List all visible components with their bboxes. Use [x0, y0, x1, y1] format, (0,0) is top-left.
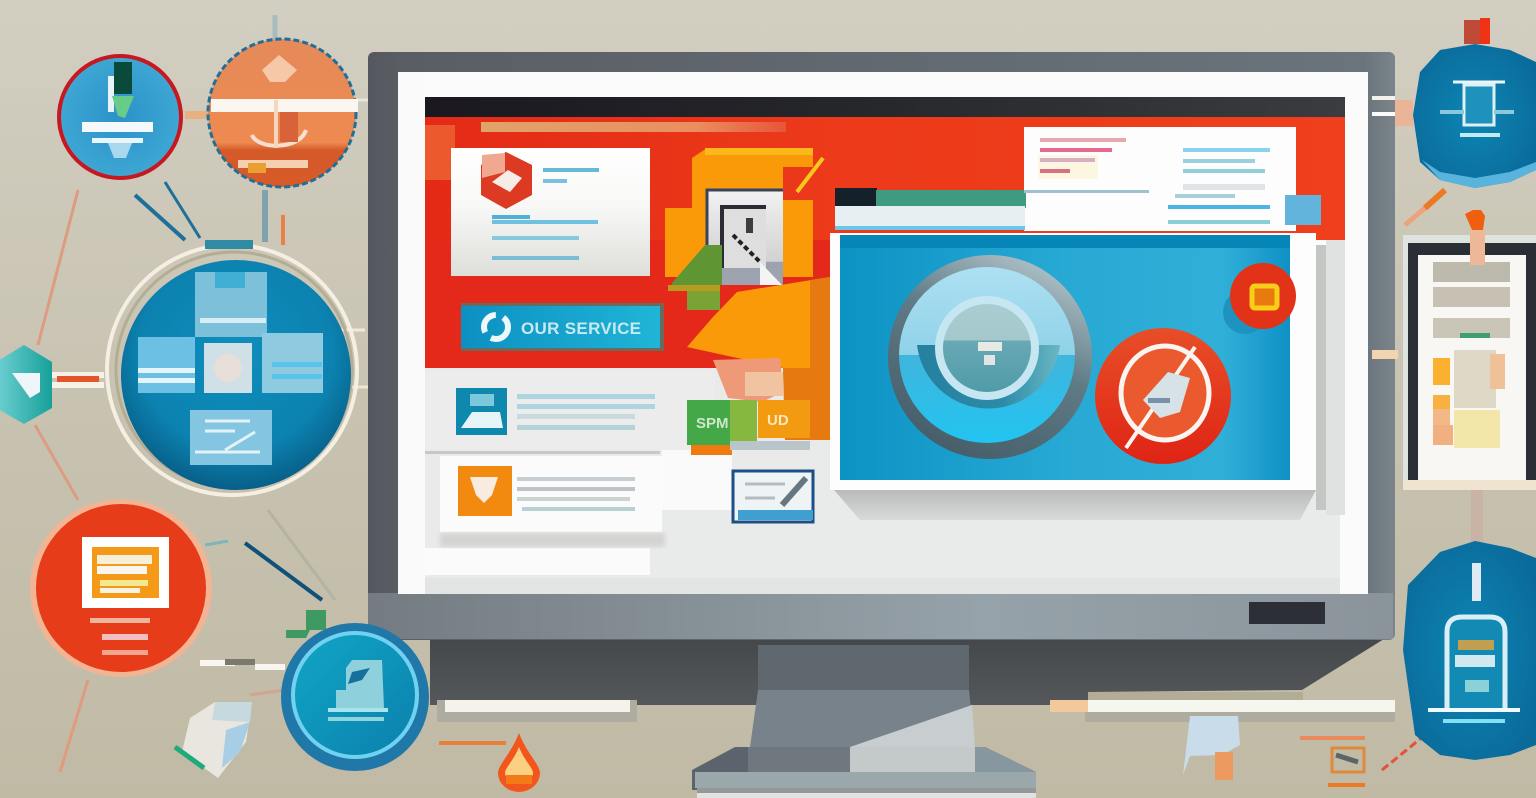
- icon: blue circle bottom: [281, 610, 429, 771]
- icon: top right blue hexagon: [1413, 18, 1536, 188]
- monitor screen: [398, 72, 1368, 594]
- hero banner: [425, 117, 1345, 368]
- shelf bar left: [437, 700, 637, 722]
- icon: red circle with card: [30, 499, 212, 677]
- connector: right middle: [1372, 350, 1398, 359]
- window tab bar: [835, 188, 1026, 230]
- icon: orange round hexagon: [208, 39, 358, 187]
- shelf bar right: [1050, 692, 1395, 722]
- icon: small circuit box: [1332, 748, 1364, 772]
- button: OUR SERVICE: [521, 319, 641, 338]
- icon: red no-sign circle: [1095, 328, 1231, 464]
- screen top bar: [425, 97, 1345, 117]
- blue content panel: [840, 235, 1290, 480]
- icon: orange pin: [1465, 210, 1485, 230]
- orange tablet graphic: [665, 148, 830, 440]
- tile: right: [262, 333, 323, 393]
- tag: UD: UD: [767, 412, 789, 429]
- monitor stand: [692, 645, 1036, 798]
- card: top right: [1024, 127, 1296, 231]
- tile: top: [195, 272, 267, 337]
- icon: green arrow: [668, 245, 722, 310]
- icon: red badge: [481, 152, 532, 209]
- icon: tablet: [707, 190, 783, 285]
- tag: SPM: [687, 400, 757, 455]
- icon: orange drop: [498, 733, 540, 792]
- monitor body: [368, 52, 1395, 640]
- icon: orange shield tile: [458, 466, 512, 516]
- monitor underside: [430, 639, 1384, 705]
- tile: centre: [204, 343, 252, 393]
- small card: [733, 471, 813, 522]
- icon: top left microphone circle: [57, 54, 183, 180]
- icon: document shard: [1183, 716, 1240, 780]
- connector: top right peach block: [1372, 96, 1413, 126]
- tag: SPM: SPM: [696, 415, 729, 432]
- icon: large blue circle with tiles: [107, 240, 357, 495]
- monitor button: [1249, 602, 1325, 624]
- list row 1: [425, 370, 715, 454]
- peach note, tags and small card: [687, 358, 813, 522]
- lens circle: [888, 255, 1092, 459]
- icon: small red badge: [1223, 263, 1296, 334]
- icon: teal hexagon left: [0, 345, 104, 424]
- tag: UD: [758, 400, 810, 438]
- icon: bottom right blue hexagon: [1403, 541, 1536, 760]
- window corner button: [1285, 195, 1321, 225]
- icon: printer tile: [456, 388, 507, 435]
- icon: crystal: [175, 702, 252, 778]
- tile: left: [138, 337, 195, 393]
- lower page background: [425, 368, 1340, 578]
- browser window: [830, 188, 1345, 520]
- list row 2: [440, 456, 665, 547]
- card: top left: [451, 148, 650, 276]
- tile: bottom: [190, 410, 272, 465]
- button: [461, 303, 664, 351]
- panel: right document: [1403, 230, 1536, 490]
